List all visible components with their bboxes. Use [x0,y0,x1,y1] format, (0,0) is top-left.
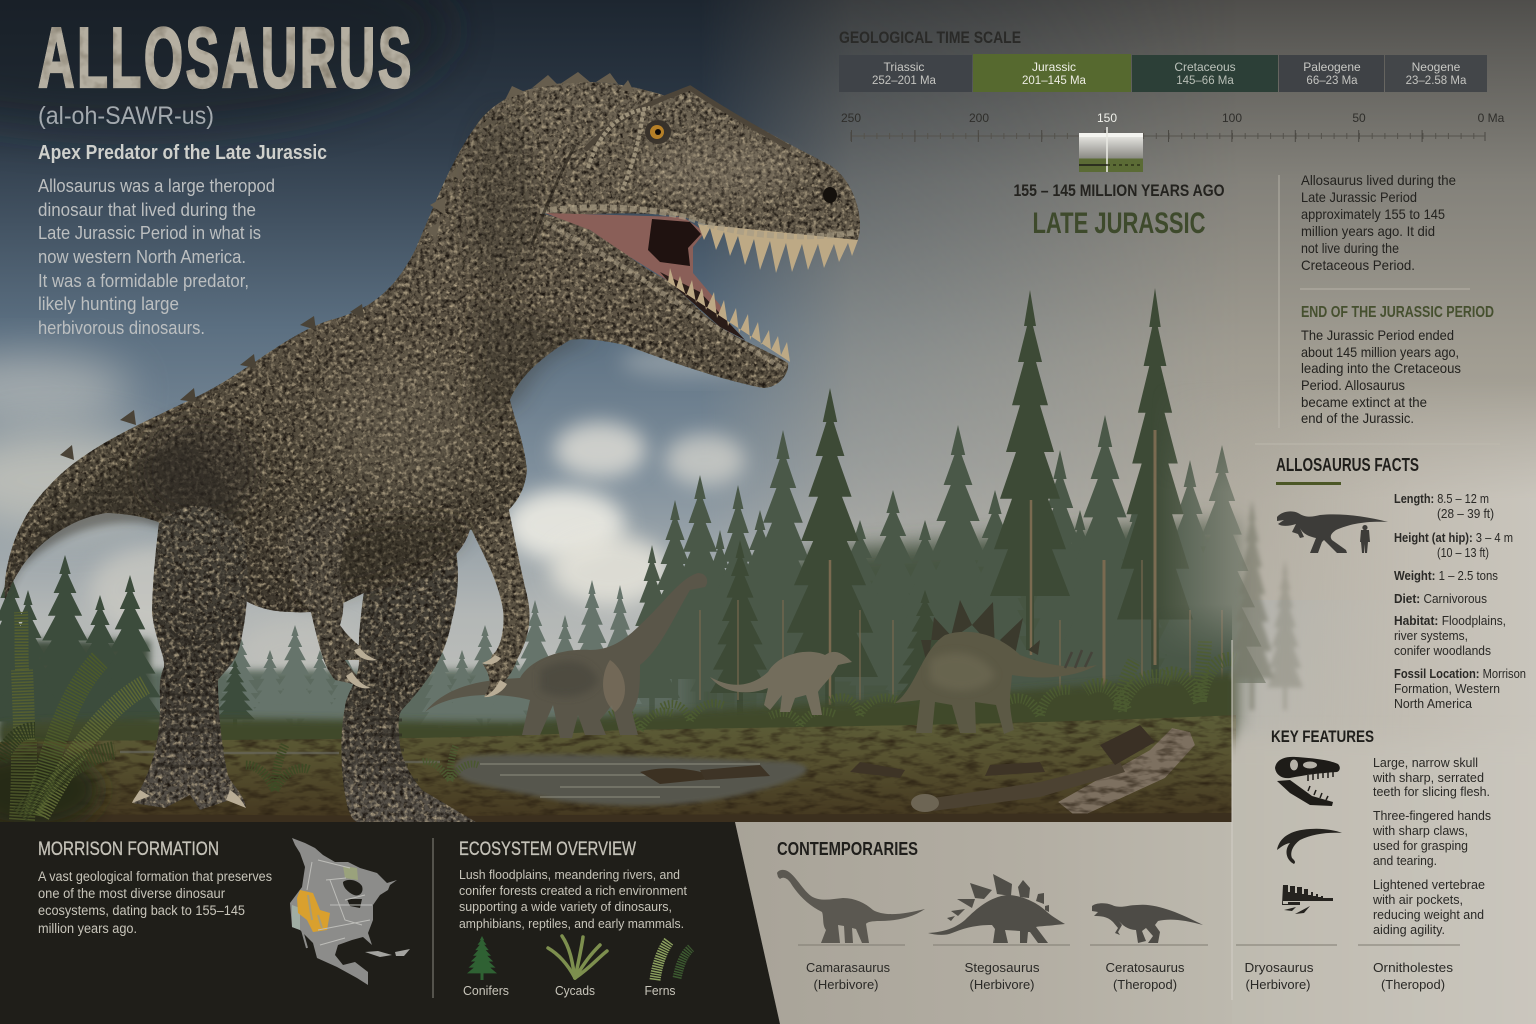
ruler: 50 [1352,111,1366,125]
period: paleogene: Paleogene [1303,60,1361,74]
description: amphibians, reptiles, and early mammals. [459,916,684,931]
pronunciation: (al-oh-SAWR-us) [38,102,214,130]
ornitholestes: (Theropod) [1381,977,1445,992]
description: supporting a wide variety of dinosaurs, [459,899,672,914]
period: paleogene [1279,55,1384,92]
period: triassic: Triassic [884,60,924,74]
muddy strip [0,813,1232,822]
description: A vast geological formation that preserves [38,869,272,884]
text: end of the jurassic period [1301,304,1494,426]
ruler: 0 Ma [1478,111,1505,125]
background dinosaur: stegosaurus [895,600,1097,734]
text: late jurassic period: Cretaceous Period. [1301,257,1415,273]
period: cretaceous: Cretaceous [1174,60,1236,74]
back ridge spikes [425,72,634,238]
heading: CONTEMPORARIES [777,839,918,859]
upper lip scales [540,207,858,236]
ruler: 150 [1097,111,1117,125]
right panel fog [1232,407,1536,750]
dryosaurus: Dryosaurus [1244,960,1314,975]
text: end of the jurassic period: The Jurassic Period ended [1301,327,1454,343]
geological time scale [839,28,1487,92]
facts list: Length: 8.5 – 12 m [1394,492,1489,506]
ruler: 100 [1222,111,1242,125]
heading: MORRISON FORMATION [38,839,219,860]
stegosaurus: Stegosaurus [964,960,1040,975]
facts list: Diet: Carnivorous [1394,592,1487,606]
ornitholestes: Ornitholestes [1373,960,1454,975]
facts list: (10 – 13 ft) [1437,546,1489,560]
feature descriptions [1372,756,1491,937]
era: LATE JURASSIC [1032,207,1206,240]
stegosaurus [928,874,1065,992]
feature descriptions: reducing weight and [1373,908,1484,922]
icon: cycads: Cycads [555,983,595,998]
brow ridge [585,88,790,150]
period: cretaceous: 145–66 Ma [1176,75,1234,87]
camarasaurus: (Herbivore) [814,977,878,992]
ecosystem overview [459,839,691,998]
mouth interior [545,213,730,333]
period: triassic: 252–201 Ma [872,75,937,87]
dryosaurus [1244,960,1314,992]
scene: forest [0,288,1266,750]
nostril [823,187,837,203]
forest fog edge [1164,446,1232,650]
allosaurus facts [1276,455,1526,711]
facts list: Habitat: Floodplains, [1394,614,1506,628]
facts list [1394,492,1526,711]
claws [132,648,507,808]
description [38,869,272,936]
divider [1255,175,1500,444]
description [459,867,687,931]
text: end of the jurassic period: Period. Allosaurus [1301,377,1405,393]
intro paragraph: now western North America. [38,247,246,267]
icon: conifers [463,936,509,998]
stegosaurus: (Herbivore) [970,977,1034,992]
background dinosaur: sauropod [425,573,707,738]
contemporaries [777,839,1460,992]
facts list: (28 – 39 ft) [1437,507,1494,521]
faint misty trees in the right panel [1230,500,1303,710]
subtitle: Apex Predator of the Late Jurassic [38,142,327,164]
feature descriptions: with air pockets, [1372,893,1463,907]
heading: GEOLOGICAL TIME SCALE [839,28,1021,47]
river [120,752,807,806]
icon: claw [1277,829,1342,864]
mid forest [624,415,1266,740]
far arm [468,500,530,697]
text: late jurassic period: approximately 155 to 145 [1301,206,1445,222]
ceratosaurus: Ceratosaurus [1106,960,1185,975]
text: end of the jurassic period: leading into the Cretaceous [1301,360,1461,376]
facts list: Height (at hip): 3 – 4 m [1394,531,1513,545]
bottom left dark panel [0,822,780,1024]
facts list: river systems, [1394,629,1468,643]
ceratosaurus: (Theropod) [1113,977,1177,992]
far treeline [0,580,1236,740]
facts list: Weight: 1 – 2.5 tons [1394,569,1498,583]
visible trunks [700,430,1222,705]
description: Lush floodplains, meandering rivers, and [459,867,680,882]
intro paragraph [38,176,275,338]
lower teeth [668,268,790,362]
icon: cycads [548,936,607,998]
text: late jurassic period: million years ago. It did [1301,223,1435,239]
intro paragraph: herbivorous dinosaurs. [38,318,205,338]
ruler: 250 [841,111,861,125]
heading: ECOSYSTEM OVERVIEW [459,839,636,860]
text: late jurassic period: Allosaurus lived during the [1301,172,1456,188]
description: conifer forests created a rich environment [459,883,687,898]
near tall conifers [710,288,1193,728]
intro paragraph: Late Jurassic Period in what is [38,223,261,243]
scene: ground and river [0,640,1236,822]
feature descriptions: Lightened vertebrae [1373,878,1485,892]
icon: vertebrae [1282,885,1333,914]
background dinosaur: hadrosaur [710,652,852,715]
camarasaurus [777,870,925,992]
period: neogene: 23–2.58 Ma [1406,75,1467,87]
icon: ferns: Ferns [644,983,676,998]
title: ALLOSAURUS [38,11,414,106]
upper teeth [698,224,858,273]
heading: KEY FEATURES [1271,727,1374,746]
leg wrinkles [156,605,418,780]
period: paleogene: 66–23 Ma [1306,75,1358,87]
icon: size comparison silhouette [1277,511,1388,553]
period: jurassic: Jurassic [1032,60,1076,74]
period: jurassic: 201–145 Ma [1022,75,1087,87]
feature descriptions: and tearing. [1373,854,1437,868]
divider [432,838,434,998]
main illustration: allosaurus [5,72,860,822]
bottom beige panel [735,640,1232,1024]
near left leg [132,506,248,810]
heading: ALLOSAURUS FACTS [1276,455,1419,475]
tail shading [5,440,250,600]
ornitholestes [1373,960,1454,992]
intro paragraph: dinosaur that lived during the [38,200,256,220]
intro paragraph: It was a formidable predator, [38,271,249,291]
icon: skull [1275,757,1340,806]
title block [38,11,414,338]
facts list: North America [1394,697,1472,711]
text: late jurassic period: Late Jurassic Period [1301,189,1417,205]
text: late jurassic period: not live during the [1301,240,1399,256]
right panel lower wash [1232,728,1242,822]
fallen log [700,725,1195,818]
facts list: Formation, Western [1394,682,1500,696]
lower jaw scales [545,222,785,370]
description: ecosystems, dating back to 155–145 [38,903,245,918]
ruler [841,111,1505,172]
eye [645,120,671,144]
map: north america [290,838,410,985]
feature descriptions: with sharp, serrated [1372,771,1484,785]
feature descriptions: with sharp claws, [1372,824,1468,838]
period: neogene: Neogene [1412,60,1461,74]
undergrowth ferns [610,640,1235,730]
ground [0,715,1236,822]
neck fold [532,145,575,245]
body light patch [320,360,480,500]
description: one of the most diverse dinosaur [38,886,225,901]
intro paragraph: Allosaurus was a large theropod [38,176,275,196]
feature descriptions: Large, narrow skull [1373,756,1478,770]
icon: ferns [644,941,691,998]
camarasaurus: Camarasaurus [806,960,890,975]
facts list: Fossil Location: Morrison [1394,667,1526,681]
left trees [0,555,255,750]
morrison formation [38,838,410,985]
near arm [286,495,377,688]
description: million years ago. [38,921,137,936]
period: cretaceous [1132,55,1278,92]
shading on belly and neck [300,519,470,600]
period: triassic [839,55,972,92]
body, neck, head [5,82,860,613]
feature descriptions: teeth for slicing flesh. [1373,785,1490,799]
icon: conifers: Conifers [463,983,509,998]
intro paragraph: likely hunting large [38,294,179,314]
date range: 155 – 145 MILLION YEARS AGO [1014,181,1224,200]
key features [1271,727,1491,937]
period: jurassic [973,54,1131,92]
undergrowth band [0,672,1236,760]
late jurassic marker [1079,127,1143,172]
feature descriptions: used for grasping [1373,839,1468,853]
ceratosaurus [1092,903,1203,992]
left foreground fern [0,612,478,830]
text: end of the jurassic period: became extinct at the [1301,394,1427,410]
far-side right leg [341,535,476,822]
text: end of the jurassic period: about 145 million years ago, [1301,344,1459,360]
ruler: 200 [969,111,989,125]
period: neogene [1385,55,1487,92]
text: late jurassic period [1301,172,1456,273]
text: end of the jurassic period: end of the Jurassic. [1301,410,1414,426]
facts list: conifer woodlands [1394,644,1491,658]
feature descriptions: Three-fingered hands [1373,809,1491,823]
dryosaurus: (Herbivore) [1246,977,1310,992]
feature descriptions: aiding agility. [1373,923,1445,937]
